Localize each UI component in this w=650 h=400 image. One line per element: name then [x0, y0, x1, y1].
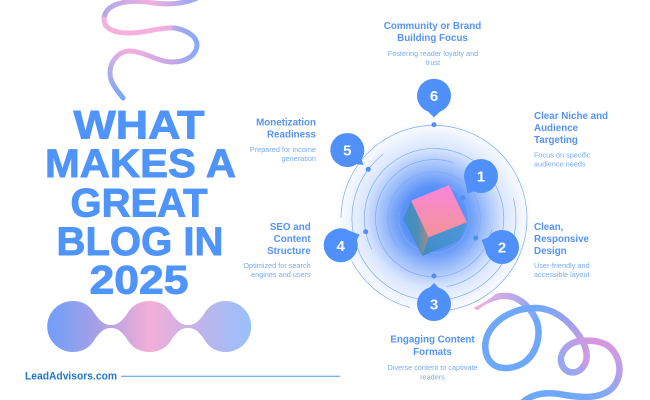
label 6: Community — [384, 21, 481, 67]
marker 1: 1 — [477, 168, 485, 186]
title: WHAT — [74, 103, 204, 147]
central blue glow — [336, 120, 532, 316]
label 4: SEO: engines and users — [251, 270, 311, 279]
label 3: Engaging Content: Engaging Content — [390, 334, 475, 346]
title: 2025 — [90, 259, 188, 303]
label 5: Monetization: Prepared for income — [250, 145, 316, 154]
label 6: Community: Community or Brand — [384, 21, 481, 32]
label 5: Monetization: Monetization — [256, 118, 316, 128]
label 5: Monetization: Readiness — [267, 130, 317, 140]
label 4: SEO: Structure — [267, 246, 311, 257]
label 1: Clear Niche: Focus on specific — [534, 150, 591, 160]
marker 5: 5 — [343, 142, 351, 160]
brand footer: LeadAdvisors.com — [25, 370, 117, 382]
marker 4 — [324, 228, 368, 262]
title: MAKES A — [45, 142, 236, 186]
title: BLOG IN — [56, 220, 224, 264]
marker 5 — [330, 133, 371, 172]
marker 3 — [417, 274, 451, 321]
title — [45, 103, 236, 303]
label 4: SEO — [243, 222, 311, 279]
label 3: Engaging Content: readers — [420, 372, 445, 382]
label 3: Engaging Content: Formats — [413, 347, 452, 358]
marker 4: 4 — [337, 238, 346, 255]
label 6: Community: Fostering reader loyalty and — [388, 49, 478, 58]
label 2: Clean Design: Clean, — [534, 222, 564, 233]
label 4: SEO: SEO and — [270, 222, 311, 233]
marker 6 — [417, 79, 451, 127]
radial diagram — [324, 79, 532, 321]
label 4: SEO: Optimized for search — [243, 261, 311, 270]
label 5: Monetization — [250, 118, 317, 163]
marker 2: 2 — [498, 240, 506, 256]
label 2: Clean Design — [534, 222, 590, 279]
title: GREAT — [70, 181, 208, 225]
label 3: Engaging Content: Diverse content to captivate — [387, 363, 478, 372]
label 6: Community: Building Focus — [397, 33, 468, 44]
cube — [403, 185, 467, 256]
label 1: Clear Niche: Audience — [534, 123, 579, 134]
decorative connected circles — [47, 301, 251, 352]
label 6: Community: trust — [426, 58, 440, 67]
marker 3: 3 — [430, 296, 438, 314]
label 1: Clear Niche: Targeting — [534, 135, 578, 146]
label 4: SEO: Content — [274, 234, 311, 245]
decorative squiggle: top — [104, 0, 197, 98]
label 1: Clear Niche: audience needs — [534, 160, 586, 168]
decorative squiggle: bottom right — [477, 296, 619, 400]
label 5: Monetization: generation — [282, 154, 316, 163]
label 2: Clean Design: accessible layout — [534, 270, 590, 279]
marker 6: 6 — [430, 88, 438, 105]
marker 2 — [473, 230, 519, 264]
label 1: Clear Niche — [534, 111, 608, 168]
label 1: Clear Niche: Clear Niche and — [534, 111, 608, 122]
label 2: Clean Design: Design — [534, 246, 567, 257]
marker 1 — [460, 159, 498, 200]
label 2: Clean Design: User-friendly and — [534, 261, 590, 270]
concentric rings — [341, 125, 527, 310]
label 2: Clean Design: Responsive — [534, 234, 590, 245]
label 3: Engaging Content — [387, 334, 478, 382]
